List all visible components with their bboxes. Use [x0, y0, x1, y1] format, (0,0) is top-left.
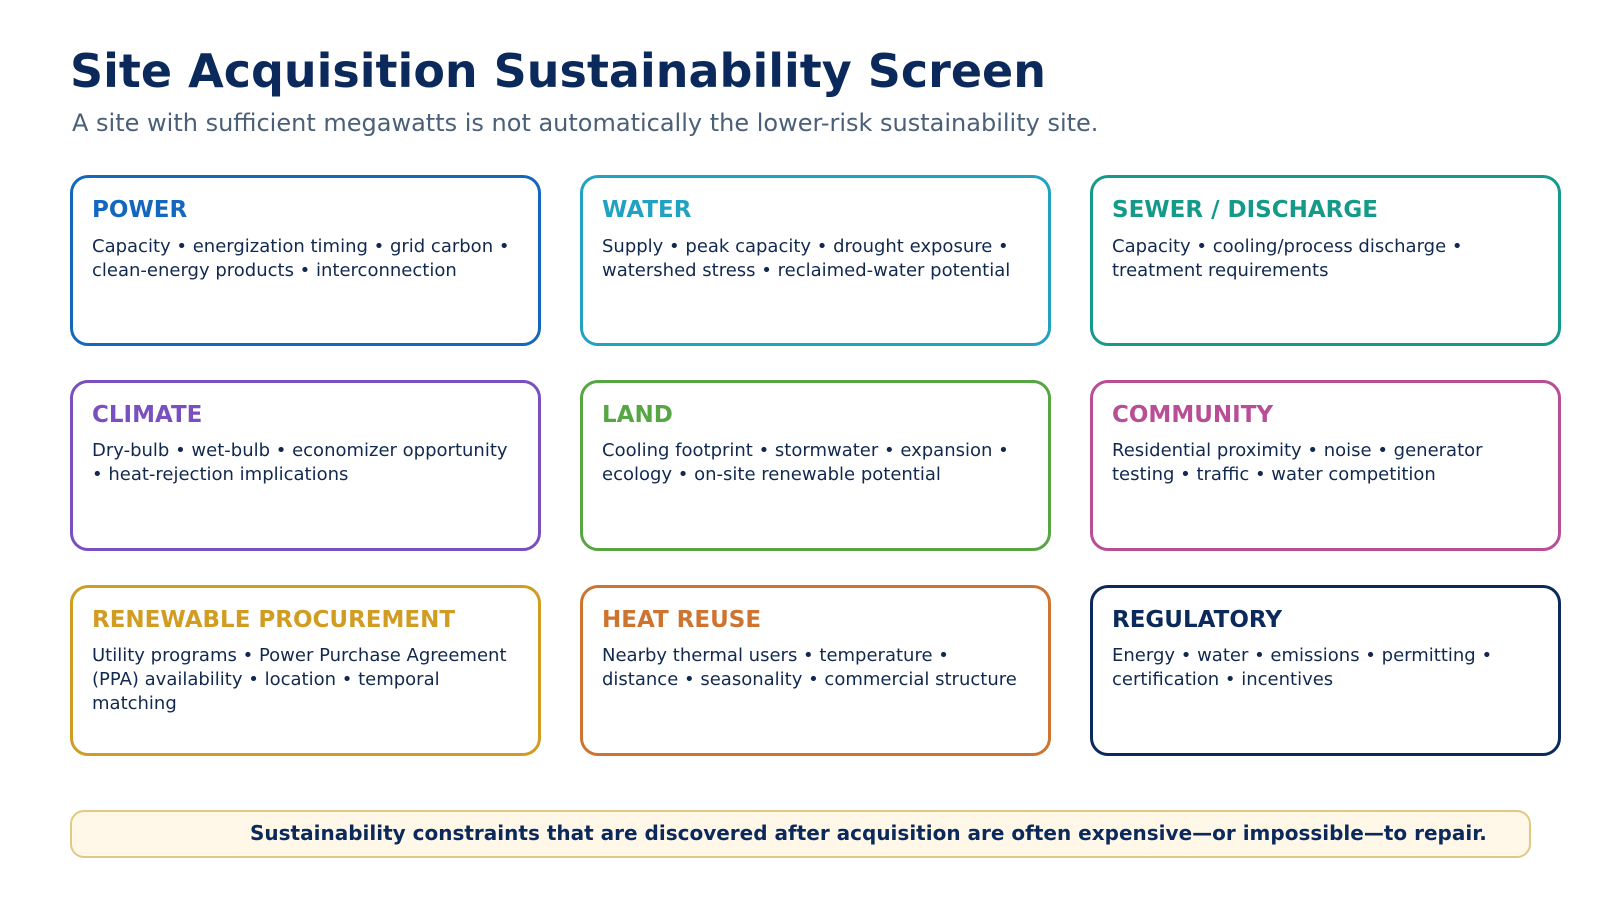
panel: climate: Dry-bulb • wet-bulb • economizer opportunity: [92, 440, 508, 461]
panel: renewable procurement: (PPA) availability • location • temporal: [92, 669, 440, 690]
panel: land: Cooling footprint • stormwater • expansion •: [602, 440, 1009, 461]
callout banner: Sustainability constraints that are discovered after acquisition are often expensive—or impossible—to repair.: [250, 821, 1487, 845]
panel: regulatory: Energy • water • emissions • permitting •: [1112, 645, 1492, 666]
panel: climate: [70, 380, 541, 551]
panel: power: Capacity • energization timing • grid carbon •: [92, 236, 509, 257]
panel: community: [1090, 380, 1561, 551]
panel: sewer / discharge: SEWER / DISCHARGE: [1112, 197, 1378, 223]
panel: sewer / discharge: [1090, 175, 1561, 346]
panel: heat reuse: HEAT REUSE: [602, 607, 761, 633]
panel: climate: • heat-rejection implications: [92, 464, 348, 485]
panel: renewable procurement: RENEWABLE PROCUREMENT: [92, 607, 455, 633]
panel: water: [580, 175, 1051, 346]
panel: regulatory: REGULATORY: [1112, 607, 1282, 633]
panel: water: Supply • peak capacity • drought exposure •: [602, 236, 1009, 257]
panel: heat reuse: distance • seasonality • commercial structure: [602, 669, 1017, 690]
panel: heat reuse: Nearby thermal users • temperature •: [602, 645, 949, 666]
panel: power: [70, 175, 541, 346]
subtitle: A site with sufficient megawatts is not automatically the lower-risk sustainability site.: [72, 109, 1098, 137]
panel: land: LAND: [602, 402, 673, 428]
panel: community: COMMUNITY: [1112, 402, 1273, 428]
panel: community: Residential proximity • noise • generator: [1112, 440, 1483, 461]
panel: water: WATER: [602, 197, 691, 223]
panel: sewer / discharge: Capacity • cooling/process discharge •: [1112, 236, 1462, 257]
callout banner: [70, 810, 1531, 858]
panel: water: watershed stress • reclaimed-water potential: [602, 260, 1010, 281]
panel: renewable procurement: [70, 585, 541, 756]
panel: community: testing • traffic • water competition: [1112, 464, 1436, 485]
panel: power: POWER: [92, 197, 187, 223]
panel: regulatory: [1090, 585, 1561, 756]
panel: land: [580, 380, 1051, 551]
title: Site Acquisition Sustainability Screen: [70, 44, 1046, 98]
panel: power: clean-energy products • interconnection: [92, 260, 457, 281]
panel: renewable procurement: Utility programs • Power Purchase Agreement: [92, 645, 507, 666]
panel: sewer / discharge: treatment requirements: [1112, 260, 1328, 281]
panel: land: ecology • on-site renewable potential: [602, 464, 941, 485]
panel: climate: CLIMATE: [92, 402, 202, 428]
panel: renewable procurement: matching: [92, 693, 177, 714]
panel: regulatory: certification • incentives: [1112, 669, 1333, 690]
panel: heat reuse: [580, 585, 1051, 756]
